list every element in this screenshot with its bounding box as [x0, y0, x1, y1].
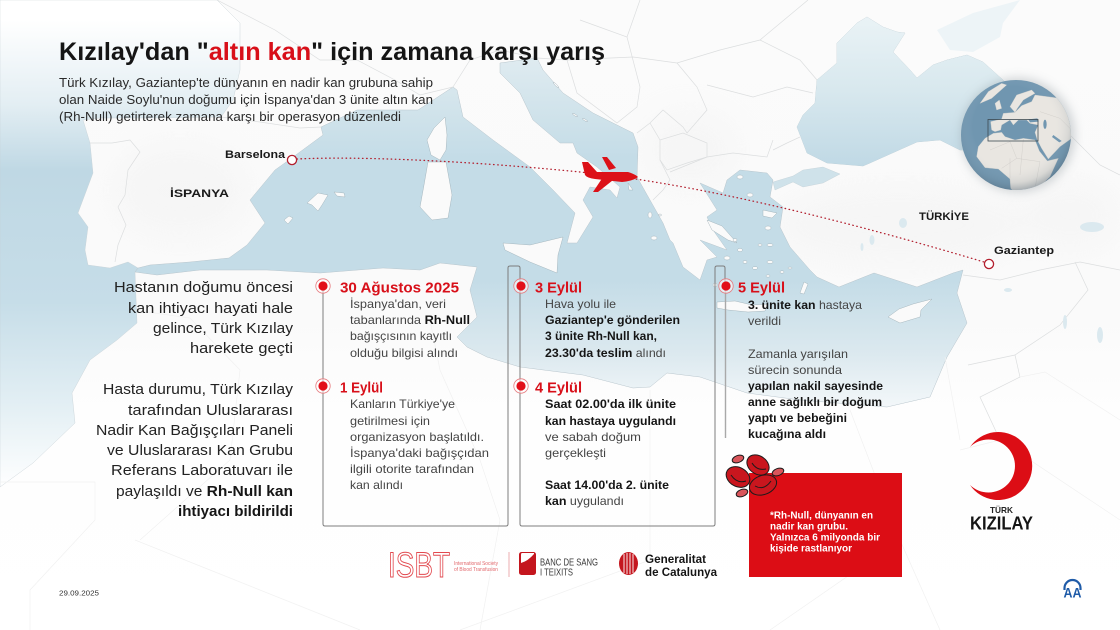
timeline: 30 Ağustos 2025 — [316, 279, 470, 360]
logo: Generalitat de Catalunya: Generalitat — [645, 554, 706, 566]
callout: Rh-Null note: Yalnızca 6 milyonda bir — [770, 532, 880, 544]
callout: Rh-Null note — [749, 473, 902, 577]
timeline: 30 Ağustos 2025: bağışçısının kayıtlı — [350, 329, 452, 343]
callout: Rh-Null note: *Rh-Null, dünyanın en — [770, 510, 873, 522]
label: Türkiye: TÜRKİYE — [919, 210, 969, 223]
left text: process: ihtiyacı bildirildi — [178, 504, 293, 520]
logo: Türk Kızılay: TÜRK — [990, 505, 1014, 515]
subtitle: (Rh-Null) getirterek zamana karşı bir operasyon düzenledi — [59, 109, 401, 124]
timeline: 4 Eylül: Saat 14.00'da 2. ünite — [545, 478, 669, 492]
timeline frame — [323, 266, 726, 526]
callout: Rh-Null note: kişide rastlanıyor — [770, 544, 852, 554]
left text: process: Hasta durumu, Türk Kızılay — [103, 382, 294, 398]
left text: process: tarafından Uluslararası — [128, 403, 293, 419]
islands — [284, 82, 932, 323]
logo: Banc de Sang i Teixits: I TEIXITS — [540, 568, 573, 578]
timeline: 1 Eylül: Kanların Türkiye'ye — [350, 397, 455, 411]
logo: Generalitat de Catalunya — [619, 552, 718, 579]
title: Kızılay'dan "altın kan" için zamana karşı yarış — [59, 38, 605, 66]
timeline: 4 Eylül: kan hastaya uygulandı — [545, 414, 676, 428]
left text: process: ve Uluslararası Kan Grubu — [107, 443, 293, 459]
subtitle: olan Naide Soylu'nun doğumu için İspanya'dan 3 ünite altın kan — [59, 92, 433, 107]
subtitle — [59, 75, 433, 124]
timeline: 3 Eylül: 23.30'da teslim alındı — [545, 346, 666, 360]
locator globe — [961, 78, 1075, 196]
timeline: 3 Eylül: 3 ünite Rh-Null kan, — [545, 329, 657, 343]
timeline: 1 Eylül: kan alındı — [350, 478, 403, 492]
timeline: 1 Eylül — [316, 379, 489, 492]
timeline: 3 Eylül: Gaziantep'e gönderilen — [545, 313, 680, 327]
timeline: 4 Eylül: ve sabah doğum — [545, 430, 641, 444]
left text: process — [96, 382, 294, 520]
logo: Türk Kızılay: KIZILAY — [970, 514, 1033, 534]
left text: need: kan ihtiyacı hayati hale — [128, 301, 293, 317]
logo: ISBT: ISBT — [388, 546, 450, 585]
timeline: 3 Eylül — [514, 279, 680, 360]
callout: Rh-Null note: nadir kan grubu. — [770, 522, 848, 532]
timeline: 30 Ağustos 2025: 30 Ağustos 2025 — [340, 280, 459, 296]
label: Barselona: Barselona — [225, 149, 286, 161]
timeline: 30 Ağustos 2025: İspanya'dan, veri — [350, 297, 446, 311]
timeline: 1 Eylül: organizasyon başlatıldı. — [350, 430, 484, 444]
left text: process: Nadir Kan Bağışçıları Paneli — [96, 423, 293, 439]
timeline: 1 Eylül: getirilmesi için — [350, 414, 430, 428]
logo: Generalitat de Catalunya: de Catalunya — [645, 567, 718, 579]
logo: Banc de Sang i Teixits — [519, 552, 598, 578]
logo: Türk Kızılay — [970, 432, 1033, 534]
timeline: 1 Eylül: 1 Eylül — [340, 380, 383, 396]
icon: blood cells — [722, 451, 785, 499]
subtitle: Türk Kızılay, Gaziantep'te dünyanın en nadir kan grubuna sahip — [59, 75, 433, 90]
left text: process: Referans Laboratuvarı ile — [111, 463, 293, 479]
timeline: 5 Eylül: kucağına aldı — [748, 427, 826, 441]
timeline: 4 Eylül: kan uygulandı — [545, 494, 624, 508]
timeline: 5 Eylül: Zamanla yarışılan — [748, 347, 848, 361]
label: İspanya: İSPANYA — [170, 187, 229, 200]
logo: ISBT: International Society — [454, 561, 498, 567]
lakes — [860, 218, 1104, 343]
left text: need: Hastanın doğumu öncesi — [114, 280, 293, 296]
timeline: 5 Eylül: 5 Eylül — [738, 280, 785, 296]
timeline: 4 Eylül — [514, 379, 676, 508]
timeline: 4 Eylül: gerçekleşti — [545, 446, 606, 460]
timeline: 5 Eylül: yapılan nakil sayesinde — [748, 379, 883, 393]
timeline: 1 Eylül: ilgili otorite tarafından — [350, 462, 474, 476]
Sea of Marmara — [773, 167, 840, 190]
timeline: 5 Eylül: yaptı ve bebeğini — [748, 411, 847, 425]
timeline: 3 Eylül: Hava yolu ile — [545, 297, 616, 311]
icon: airplane — [582, 157, 638, 192]
timeline: 3 Eylül: 3 Eylül — [535, 280, 582, 296]
logo: AA: AA — [1064, 584, 1082, 600]
left text: process: paylaşıldı ve Rh-Null kan — [116, 484, 293, 500]
marker: Gaziantep — [984, 259, 994, 269]
date: 29.09.2025 — [59, 588, 99, 598]
logo: Banc de Sang i Teixits: BANC DE SANG — [540, 556, 598, 568]
label: Gaziantep: Gaziantep — [994, 245, 1054, 257]
Sea of Azov — [937, 0, 1020, 52]
timeline: 1 Eylül: İspanya'daki bağışçıdan — [350, 446, 489, 460]
logo: ISBT: of Blood Transfusion — [454, 567, 498, 573]
Black Sea — [797, 17, 1030, 166]
timeline: 5 Eylül: 3. ünite kan hastaya — [748, 298, 862, 312]
marker: Barcelona — [287, 155, 297, 165]
left text: need: harekete geçti — [190, 341, 293, 357]
timeline: 30 Ağustos 2025: tabanlarında Rh-Null — [350, 313, 470, 327]
borders — [90, 0, 1120, 440]
left text: need — [114, 280, 294, 357]
timeline: 4 Eylül: 4 Eylül — [535, 380, 582, 396]
left text: need: gelince, Türk Kızılay — [153, 321, 294, 337]
timeline: 5 Eylül: verildi — [748, 314, 781, 328]
timeline: 4 Eylül: Saat 02.00'da ilk ünite — [545, 397, 676, 411]
Atlantic Ocean — [0, 0, 240, 487]
flight route — [287, 155, 994, 269]
timeline: 5 Eylül: sürecin sonunda — [748, 363, 842, 377]
Mediterranean Sea — [135, 58, 967, 407]
timeline: 5 Eylül: anne sağlıklı bir doğum — [748, 395, 882, 409]
timeline: 5 Eylül — [719, 279, 883, 441]
timeline: 30 Ağustos 2025: olduğu bilgisi alındı — [350, 346, 458, 360]
